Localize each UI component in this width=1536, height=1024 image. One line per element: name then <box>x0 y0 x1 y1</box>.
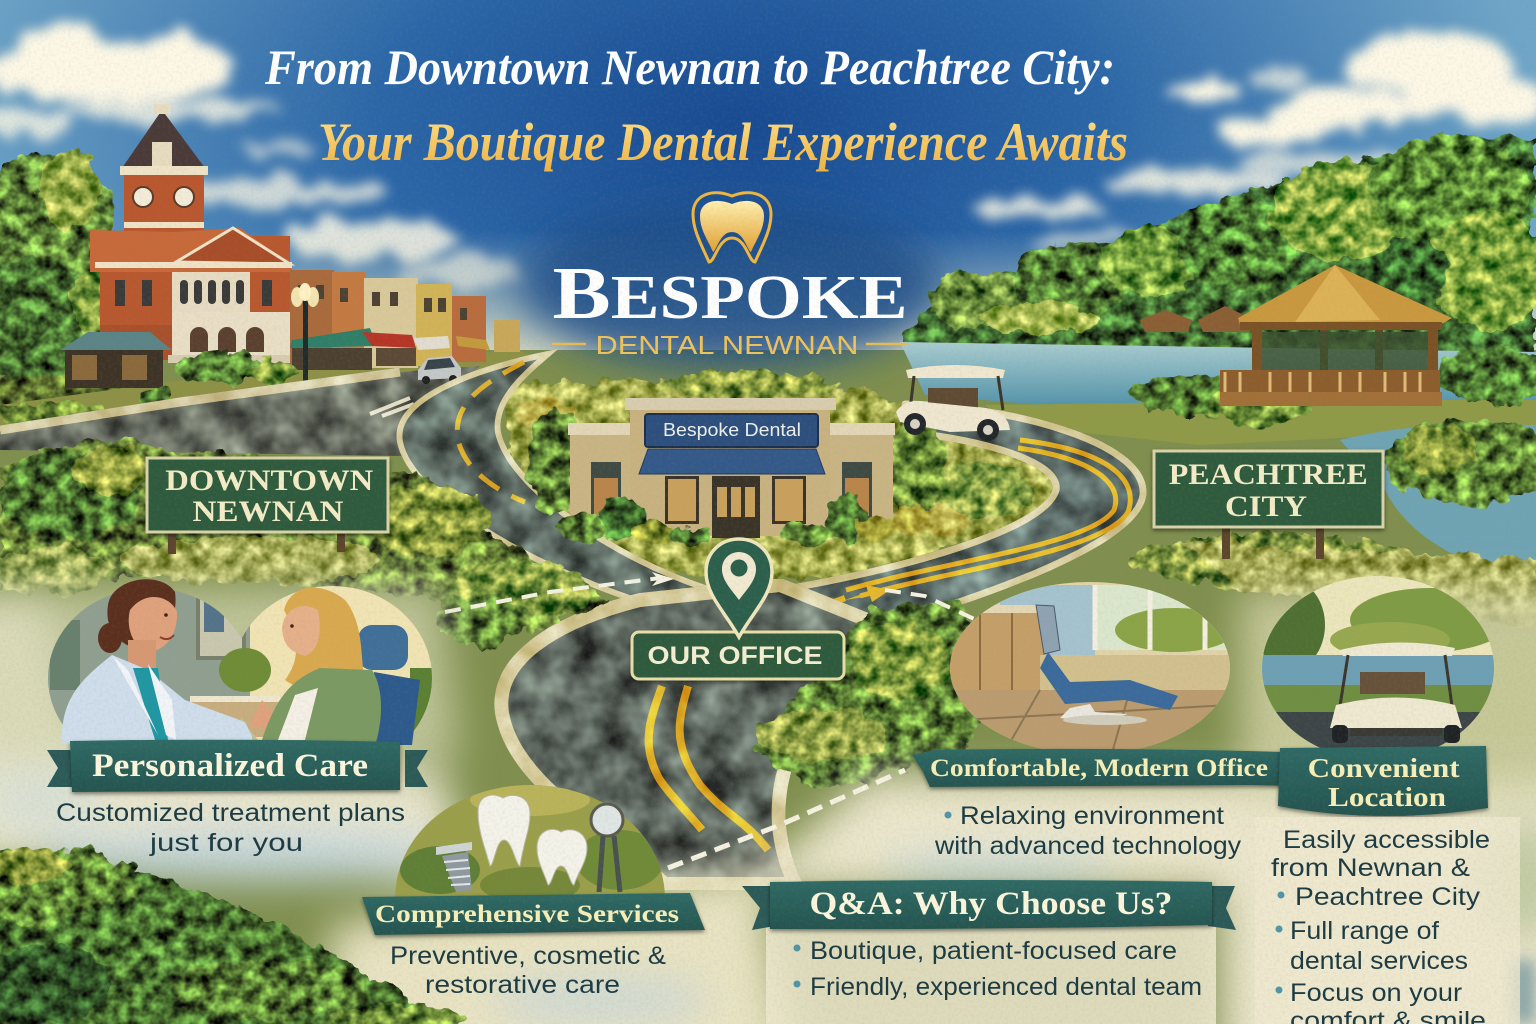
bottom left foliage <box>0 847 470 1024</box>
icon: location pin <box>706 539 772 637</box>
horizon glow <box>0 230 1536 360</box>
curved road to Peachtree City <box>715 404 1143 645</box>
river right <box>1340 424 1536 578</box>
small park shelter <box>60 332 172 388</box>
office sign: Bespoke Dental <box>663 420 801 440</box>
left mid foliage <box>0 440 610 650</box>
lake <box>900 342 1536 420</box>
text: modern office description: Relaxing environment <box>960 802 1224 830</box>
icon: large tooth <box>478 795 530 866</box>
right mid foliage <box>750 540 1536 790</box>
sign: Downtown Newnan: NEWNAN <box>192 495 344 528</box>
text: services description: Preventive, cosmetic & <box>390 942 666 970</box>
label: our office: OUR OFFICE <box>648 642 822 670</box>
banner: modern office: Comfortable, Modern Office <box>930 755 1268 782</box>
bottom right corner wash <box>1510 960 1536 1024</box>
lower road <box>501 585 880 884</box>
route arrow left <box>652 572 674 586</box>
right bank foliage <box>1130 347 1536 618</box>
text: services description <box>390 942 666 999</box>
text: services description: restorative care <box>425 971 620 999</box>
street bushes <box>0 352 298 422</box>
label: our office <box>632 632 844 679</box>
title: Your Boutique Dental Experience Awaits <box>318 112 1128 172</box>
banner: convenient location: Location <box>1328 782 1446 812</box>
logo dark backdrop <box>520 200 940 370</box>
vignette: convenient location <box>1262 576 1494 748</box>
sign: Downtown Newnan <box>147 458 388 554</box>
vignette: comprehensive services <box>395 785 665 896</box>
courthouse <box>90 104 292 363</box>
office sign <box>645 414 818 447</box>
banner: personalized care: Personalized Care <box>92 748 368 784</box>
panel: convenient location text: Focus on your <box>1290 979 1462 1007</box>
vignette: personalized care <box>48 579 432 746</box>
icon: tooth <box>693 193 771 262</box>
golf cart on road <box>896 365 1010 441</box>
sign: Peachtree City: CITY <box>1225 490 1307 523</box>
clock tower <box>120 104 208 237</box>
text: personalized care description <box>56 799 405 857</box>
land base <box>0 350 1536 1024</box>
text: personalized care description: Customized treatment plans <box>56 799 405 827</box>
sign: Peachtree City: PEACHTREE <box>1169 458 1368 491</box>
right tree line <box>905 134 1536 370</box>
icon: small tooth <box>537 829 587 885</box>
banner: comprehensive services <box>362 893 705 935</box>
panel: convenient location text <box>1255 817 1520 1024</box>
panel: Q&A text <box>766 922 1216 1024</box>
vignette: modern office <box>950 582 1230 750</box>
sign: Downtown Newnan: DOWNTOWN <box>165 464 374 497</box>
left trees <box>0 150 130 415</box>
banner: convenient location: Convenient <box>1308 753 1460 783</box>
gazebo <box>1220 265 1452 406</box>
panel: convenient location text: from Newnan & <box>1271 854 1470 882</box>
panel: Q&A text: Friendly, experienced dental team <box>810 973 1202 1001</box>
banner: comprehensive services: Comprehensive Services <box>375 901 679 928</box>
banner: modern office <box>912 749 1292 787</box>
icon: dental mirror <box>591 804 623 892</box>
lower misty wash right <box>330 590 1536 1024</box>
office shrubs <box>556 496 930 546</box>
clouds <box>0 26 1536 286</box>
icon: dental implant <box>436 842 472 892</box>
panel: convenient location text: Peachtree City <box>1295 883 1481 911</box>
office building <box>525 398 945 546</box>
lamp post <box>291 283 319 387</box>
panel: convenient location text: dental services <box>1290 947 1468 975</box>
left ground <box>0 350 540 430</box>
panel: convenient location text: Easily accessible <box>1283 826 1490 854</box>
patient <box>262 588 420 745</box>
panel: Q&A text: Boutique, patient-focused care <box>810 937 1177 965</box>
road curve from town <box>399 354 705 605</box>
text: modern office description <box>934 802 1242 860</box>
left road <box>0 366 480 456</box>
white dashed route to Q&A <box>668 770 905 868</box>
sign: Peachtree City <box>1154 451 1383 559</box>
logo: Bespoke Dental Newnan <box>552 193 908 360</box>
text: personalized care description: just for you <box>149 829 303 857</box>
title: From Downtown Newnan to Peachtree City: <box>264 39 1115 95</box>
panel: convenient location text: Full range of <box>1290 917 1439 945</box>
background sky <box>0 0 1536 420</box>
awning <box>639 449 825 474</box>
banner: convenient location <box>1278 746 1488 816</box>
white dashed route left <box>445 578 660 612</box>
title <box>264 39 1128 172</box>
logo: Bespoke Dental Newnan: DENTAL NEWNAN <box>596 330 858 360</box>
island trees <box>525 410 945 522</box>
downtown shops <box>290 270 520 370</box>
route arrow right <box>845 585 890 602</box>
lower misty wash left <box>0 585 480 890</box>
banner: personalized care <box>47 740 428 792</box>
office lawn island <box>500 371 1060 580</box>
doctor <box>62 579 272 744</box>
text: modern office description: with advanced technology <box>934 832 1242 860</box>
banner: Q&A <box>742 880 1236 930</box>
white dashed route right <box>885 590 985 624</box>
logo: Bespoke Dental Newnan: BESPOKE <box>552 253 908 335</box>
golf cart <box>1330 642 1462 743</box>
lake shore <box>985 400 1536 445</box>
small distant gazebos <box>1140 306 1254 332</box>
dental chair <box>1036 605 1178 725</box>
banner: Q&A: Q&A: Why Choose Us? <box>810 886 1172 922</box>
car on street <box>418 356 461 384</box>
